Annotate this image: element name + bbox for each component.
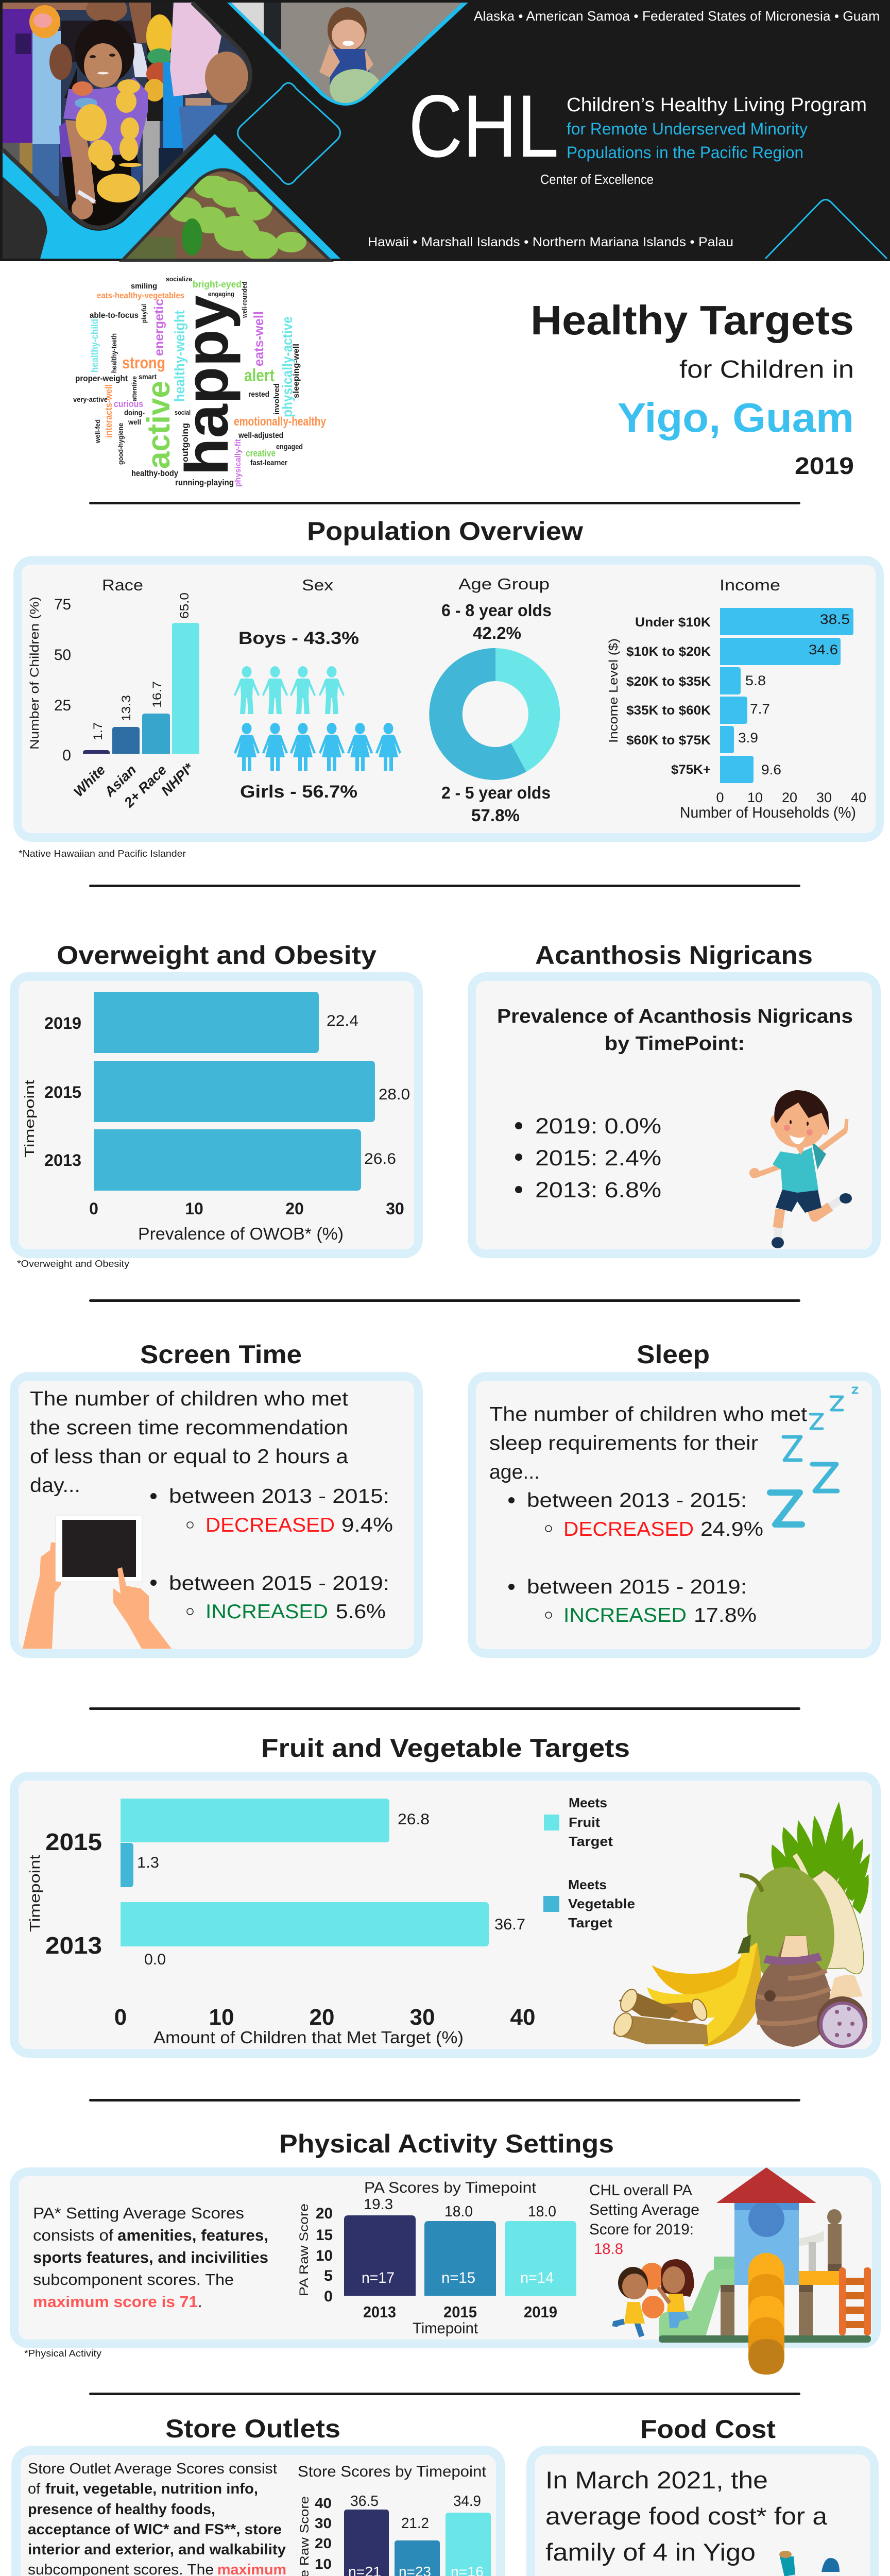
bar chart: income: 20 [782,790,797,805]
legend: fruit target [544,1795,613,1849]
text: PA description: consists of [33,2226,113,2244]
bar chart: PA scores: 2013 [363,2303,396,2321]
title block: Healthy Targets [530,297,854,343]
bar chart: income: 30 [816,790,832,805]
bar chart: income: 38.5 [820,612,850,627]
bar chart: income: $60K to $75K [626,733,711,748]
bar chart: store scores: 20 [315,2535,332,2551]
panel: physical activity settings [10,2167,881,2375]
bar chart: OWOB [22,992,410,1243]
panel: screen time: day... [30,1475,80,1497]
bar chart: income: 3.9 [738,730,758,745]
bar chart: income: $35K to $60K [626,703,711,718]
word cloud: interacts-well [104,384,114,438]
bar chart: income: $75K+ [671,762,711,777]
callout: CHL overall PA score: Score for 2019: [589,2221,694,2238]
footnote: physical activity: *Physical Activity [24,2348,101,2359]
bar chart: OWOB: 26.6 [364,1150,396,1167]
word cloud: well-adjusted [238,431,283,440]
bar chart: PA scores: 19.3 [364,2196,393,2213]
word cloud [73,275,327,487]
bar chart: OWOB: 2015 [44,1083,81,1101]
chart: race [28,576,199,811]
donut chart: age group: Age Group [458,575,550,593]
bar chart: income: $20K to $35K [626,674,711,689]
callout: CHL overall PA score: CHL overall PA [589,2182,692,2199]
program name line 3: Populations in the Pacific Region [567,143,803,162]
bar chart: PA scores: 20 [316,2205,333,2222]
word cloud: smiling [131,282,157,291]
list: sleep changes: 17.8% [694,1604,757,1626]
text: food cost statement: In March 2021, the [545,2466,768,2494]
bar chart: store scores: 30 [315,2515,332,2531]
heading: population overview: Population Overview [307,517,583,546]
heading: store outlets: Store Outlets [165,2414,340,2443]
bar chart: income: 40 [851,790,866,805]
panel: sleep: sleep requirements for their [489,1432,758,1454]
photo: girl with lei [3,3,248,226]
word cloud: engaged [276,443,303,451]
text: PA description [33,2204,268,2311]
list: screen time changes: between 2013 - 2015: [169,1485,389,1507]
panel: population overview [13,556,884,842]
bar chart: PA scores: n=15 [441,2269,475,2286]
legend: vegetable target: Meets [568,1877,607,1892]
chart: race: 0 [62,747,71,764]
bar chart: income [607,576,866,821]
pictogram: sex: Boys - 43.3% [238,629,359,648]
list: screen time changes: 5.6% [336,1601,386,1623]
bar chart: targets: 0 [114,2005,127,2030]
word cloud: playful [140,304,148,323]
list: screen time changes [150,1485,393,1623]
callout: CHL overall PA score: Setting Average [589,2201,699,2218]
bar chart: store scores: Store Scores by Timepoint [298,2463,487,2480]
bar chart: PA scores: Timepoint [413,2320,478,2337]
word cloud: outgoing [180,423,190,462]
list: prevalence values: 2019: 0.0% [535,1114,661,1139]
chart: race: 13.3 [119,695,133,721]
word cloud: able-to-focus [90,311,139,320]
bar chart: PA scores: PA Raw Score [297,2204,311,2296]
word cloud: proper-weight [75,374,128,383]
photo: toddler [227,3,468,106]
list: prevalence values [515,1114,661,1202]
panel: acanthosis nigricans: by TimePoint: [605,1033,745,1055]
bar chart: PA scores: 5 [324,2267,333,2284]
panel: screen time [10,1372,423,1658]
list: screen time changes: INCREASED [206,1601,328,1623]
bar chart: store scores: 40 [315,2495,332,2511]
word cloud: good-hygiene [116,423,125,465]
word cloud: alert [244,366,275,385]
icon: running boy [749,1090,852,1248]
header banner [0,0,890,263]
bar chart: PA scores: PA Scores by Timepoint [364,2179,537,2196]
text: store description: fruit, vegetable, nutrition info, [45,2481,258,2497]
panel: overweight and obesity [10,972,423,1258]
heading: acanthosis nigricans: Acanthosis Nigricans [535,941,813,970]
pictogram: sex [234,576,401,802]
panel: sleep [468,1372,881,1658]
heading: screen time: Screen Time [140,1340,302,1369]
word cloud: very-active [73,395,108,403]
bar chart: income: Income [720,576,780,594]
text: store description: presence of healthy foods, [28,2501,215,2518]
word cloud: creative [246,448,276,459]
partner regions, top: Alaska • American Samoa • Federated States of Micronesia • Guam [474,8,880,24]
list: prevalence values: 2013: 6.8% [535,1178,661,1202]
word cloud: socialize [166,275,192,283]
bar chart: PA scores: 0 [324,2288,333,2305]
word cloud: social [175,409,191,416]
text: store description: interior and exterior, and walkability [28,2541,286,2558]
bar chart: targets: 36.7 [494,1916,525,1933]
bar chart: targets: Amount of Children that Met Target (%) [153,2028,464,2047]
donut chart: age group [429,575,560,825]
word cloud: engaging [208,290,234,298]
icon: playground [659,2167,871,2375]
word cloud: doing- [124,409,145,417]
bar chart: targets: 2013 [45,1932,102,1959]
legend: vegetable target: Vegetable [568,1896,635,1911]
chart: race: 16.7 [150,681,164,708]
icon: hands on tablet [23,1515,172,1649]
text: food cost statement: family of 4 in Yigo [545,2538,756,2566]
panel: store outlets [11,2446,505,2576]
bar chart: income: 9.6 [761,762,781,777]
program name: Children’s Healthy Living Program [567,94,867,116]
bar chart: targets: 10 [209,2005,234,2030]
bar chart: income: 34.6 [809,642,838,657]
text: PA description: amenities, features, [117,2226,268,2244]
panel: sleep: age... [489,1461,540,1483]
panel: screen time: the screen time recommendation [30,1417,348,1439]
title block: for Children in [679,356,854,383]
chart: race: White [71,762,108,800]
chart: race: Number of Children (%) [28,597,42,750]
chart: race: 25 [54,697,71,714]
list: sleep changes: INCREASED [563,1604,687,1626]
word cloud: healthy-child [90,319,100,372]
bar chart: targets: 1.3 [137,1854,159,1871]
word cloud: healthy-weight [172,310,187,402]
bar chart: targets: 40 [510,2005,535,2030]
donut chart: age group: 6 - 8 year olds [441,601,552,620]
word cloud: attentive [130,376,138,401]
bar chart: targets: 26.8 [398,1811,430,1828]
bar chart: PA scores: n=17 [362,2269,395,2286]
title block: 2019 [795,452,854,479]
bar chart: store scores: 36.5 [350,2493,379,2510]
list: sleep changes: between 2015 - 2019: [527,1576,747,1598]
bar chart: PA scores: 18.0 [444,2204,473,2220]
bar chart: income: Under $10K [635,615,711,630]
chart: race: 75 [54,596,71,613]
text: PA description: subcomponent scores. The [33,2270,234,2289]
bar chart: OWOB: Prevalence of OWOB* (%) [138,1224,344,1243]
bar chart: PA scores: 10 [316,2247,333,2264]
footnote: OWOB: *Overweight and Obesity [17,1259,129,1269]
pictogram: sex: Sex [302,576,334,594]
bar chart: OWOB: 22.4 [327,1012,358,1029]
panel: screen time: The number of children who met [30,1388,348,1410]
heading: food cost: Food Cost [640,2415,776,2444]
word cloud: energetic [152,299,166,356]
bar chart: targets: 30 [410,2005,435,2030]
bar chart: OWOB: 2013 [44,1151,81,1170]
bar chart: targets: Timepoint [27,1855,43,1932]
bar chart: income: $10K to $20K [626,645,711,659]
bar chart: income: Number of Households (%) [680,804,856,821]
bar chart: targets: 2015 [45,1828,102,1855]
photo: lettuce field [126,171,326,259]
chart: race: 50 [54,647,71,664]
legend: fruit target: Fruit [569,1815,600,1830]
word cloud: well-rounded [241,282,248,318]
bar chart: PA scores [297,2179,576,2337]
text: store description: of [28,2481,41,2497]
text: food cost statement: average food cost* for a [545,2502,828,2530]
icon: sleeping Zs [770,1387,858,1524]
word cloud: sleeping-well [292,344,301,398]
word cloud: bright-eyed [193,279,242,290]
bar chart: PA scores: 15 [316,2227,333,2244]
bar chart: store scores: 34.9 [453,2493,481,2510]
word cloud: eats-well [251,311,266,366]
text: store description: Store Outlet Average Scores consist [28,2461,277,2477]
bar chart: income: 0 [716,790,724,805]
word cloud: physically-fit [234,438,243,487]
word cloud: running-playing [175,478,234,487]
CHL wordmark: CHL [408,77,559,176]
word cloud: involved [272,383,281,415]
panel: sleep: The number of children who met [489,1403,807,1426]
word cloud: smart [139,372,157,381]
bar chart: OWOB: 2019 [44,1014,81,1032]
heading: fruit and vegetable targets: Fruit and Vegetable Targets [261,1734,630,1762]
bar chart: OWOB: Timepoint [22,1079,37,1158]
chart: race: Asian [101,762,139,800]
chart: race: NHPI* [158,760,197,799]
word cloud: eats-healthy-vegetables [97,291,184,300]
heading: overweight and obesity: Overweight and Obesity [57,941,376,970]
text: store description [28,2461,286,2576]
list: sleep changes [508,1489,763,1626]
word cloud: rested [248,390,269,399]
panel: acanthosis nigricans [468,972,881,1258]
text: PA description: PA* Setting Average Scores [33,2204,244,2222]
bar chart: income: 10 [747,790,763,805]
heading: sleep: Sleep [637,1340,710,1369]
word cloud: strong [122,353,165,372]
bar chart: OWOB: 10 [185,1199,203,1218]
text: store description: acceptance of WIC* and FS**, store [28,2521,282,2538]
bar chart: targets [27,1799,535,2047]
chart: race: 2+ Race [121,762,169,811]
text: PA description: sports features, and incivilities [33,2248,268,2266]
bar chart: PA scores: 2019 [524,2303,557,2321]
text: food cost statement [545,2466,828,2576]
bar chart: income: 7.7 [750,701,770,717]
icon: children with basketballs [615,2259,694,2336]
list: screen time changes: 9.4% [341,1514,393,1536]
legend: vegetable target: Target [568,1915,612,1930]
legend: vegetable target [543,1877,635,1930]
callout: CHL overall PA score [589,2182,699,2258]
word cloud: active [141,381,177,469]
bar chart: income: 5.8 [745,673,766,688]
bar chart: store scores [298,2463,491,2576]
bar chart: store scores: 10 [315,2556,332,2572]
bar chart: OWOB: 20 [285,1199,304,1218]
program name line 2: for Remote Underserved Minority [567,120,808,138]
panel: food cost [526,2446,890,2576]
word cloud: healthy-teeth [110,333,118,373]
word cloud: fast-learner [250,459,287,467]
word cloud: happy [173,295,241,476]
partner regions, bottom: Hawaii • Marshall Islands • Northern Mariana Islands • Palau [368,235,733,249]
list: sleep changes: between 2013 - 2015: [527,1489,747,1512]
word cloud: well [128,418,141,426]
text: PA description: . [198,2293,202,2311]
list: sleep changes: DECREASED [563,1518,694,1540]
title block: Yigo, Guam [618,395,854,440]
bar chart: OWOB: 0 [89,1199,98,1218]
word cloud: well-fed [94,419,101,444]
footnote: NHPI: *Native Hawaiian and Pacific Islander [19,849,186,859]
bar chart: PA scores: 2015 [443,2303,477,2321]
list: screen time changes: between 2015 - 2019: [169,1572,389,1595]
word cloud: healthy-body [131,468,178,478]
callout: CHL overall PA score: 18.8 [594,2241,623,2258]
donut chart: age group: 42.2% [473,623,521,642]
center of excellence: Center of Excellence [540,172,654,187]
legend: fruit target: Target [569,1834,613,1849]
panel: acanthosis nigricans: Prevalence of Acanthosis Nigricans [497,1006,853,1027]
list: prevalence values: 2015: 2.4% [535,1146,661,1171]
word cloud: physically-active [279,316,295,417]
heading: physical activity settings: Physical Activity Settings [279,2129,614,2158]
decorative diamond outline [238,83,340,184]
bar chart: store scores: 21.2 [401,2515,429,2532]
bar chart: PA scores: n=14 [520,2269,554,2286]
bar chart: income: Income Level ($) [607,638,621,743]
donut chart: age group: 2 - 5 year olds [441,783,551,802]
icon: pacific produce [610,1802,870,2048]
list: sleep changes: 24.9% [700,1518,763,1540]
panel: screen time: of less than or equal to 2 hours a [30,1446,348,1468]
icon: grocery bag [745,2551,890,2576]
bar chart: targets: 20 [310,2005,334,2030]
chart: race: 65.0 [178,592,192,619]
legend: fruit target: Meets [569,1795,607,1810]
decorative triangle outline [765,200,887,259]
list: screen time changes: DECREASED [206,1514,335,1536]
pictogram: sex: Girls - 56.7% [240,782,357,802]
panel: fruit and vegetable targets [10,1772,881,2058]
text: PA description: maximum score is 71 [33,2293,198,2311]
chart: race: Race [102,576,143,594]
bar chart: PA scores: 18.0 [528,2204,556,2220]
word cloud: curious [114,399,143,409]
bar chart: OWOB: 30 [386,1199,404,1218]
donut chart: age group: 57.8% [471,806,520,825]
bar chart: targets: 0.0 [144,1951,166,1968]
word cloud: emotionally-healthy [234,415,327,429]
bar chart: OWOB: 28.0 [379,1086,410,1103]
chart: race: 1.7 [91,722,105,740]
title block [530,297,854,479]
